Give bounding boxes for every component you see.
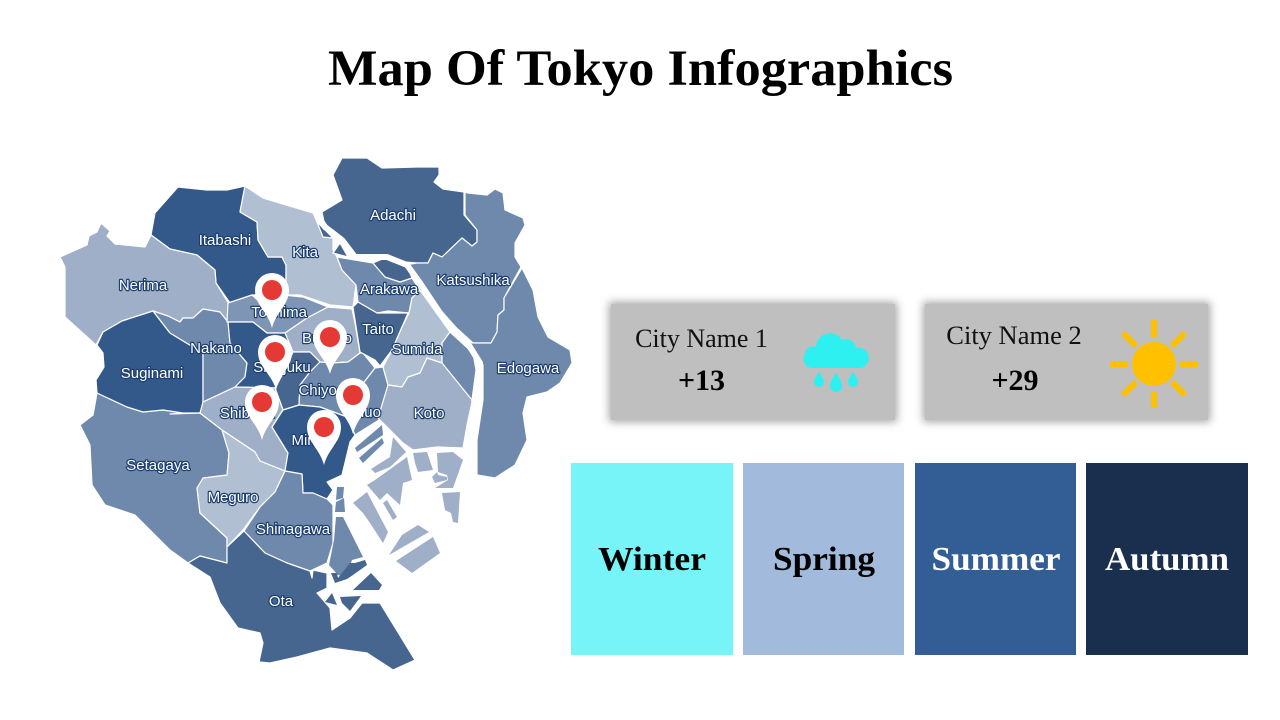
district labels: Toshima (251, 304, 308, 321)
location pin: Shinjuku (258, 335, 292, 390)
district labels: Suginami (121, 365, 183, 382)
district labels: Shibuya (220, 405, 275, 422)
city 2 name: City Name 2 (946, 320, 1082, 350)
map of Tokyo (60, 158, 572, 670)
city 1 temperature: +13 (678, 364, 725, 397)
panel: city 1 weather card (611, 304, 895, 420)
season block: Summer (915, 463, 1076, 655)
season block: Spring: Spring (773, 541, 875, 578)
district labels: Nerima (119, 277, 168, 294)
district labels: Arakawa (360, 281, 419, 298)
title: Map Of Tokyo Infographics (328, 41, 953, 97)
season block: Winter: Winter (598, 541, 706, 578)
bay islands (325, 425, 463, 611)
district labels: Nakano (190, 340, 242, 357)
panel: city 2 weather card (925, 304, 1208, 420)
river (317, 215, 480, 470)
district labels: Itabashi (199, 232, 251, 249)
city 1 name: City Name 1 (635, 324, 768, 353)
district labels: Minato (291, 432, 337, 449)
icon: sun (1110, 320, 1198, 408)
district labels (119, 207, 560, 610)
location pin: Shibuya (245, 385, 279, 440)
district labels: Edogawa (497, 360, 560, 377)
district labels: Taito (362, 321, 394, 338)
season block: Autumn: Autumn (1105, 541, 1229, 578)
district labels: Chuo (345, 404, 381, 421)
city 2 temperature: +29 (991, 364, 1039, 397)
district labels: Sumida (392, 341, 443, 358)
icon: rain cloud (803, 333, 869, 392)
district labels: Bunkyo (302, 330, 352, 347)
district labels: Shinagawa (256, 521, 331, 538)
district labels: Ota (269, 593, 294, 610)
district labels: Chiyoda (298, 382, 354, 399)
season block: Winter (571, 463, 733, 655)
district labels: Adachi (370, 207, 416, 224)
district labels: Katsushika (436, 272, 510, 289)
location pin: Minato (307, 410, 341, 465)
district labels: Koto (414, 405, 444, 422)
location pin: Bunkyo (313, 320, 347, 374)
district labels: Kita (292, 244, 319, 261)
district labels: Setagaya (126, 457, 190, 474)
district labels: Shinjuku (253, 359, 311, 376)
location pin: Toshima (255, 273, 289, 328)
season block: Autumn (1086, 463, 1248, 655)
location pin: Chuo (336, 378, 370, 434)
wards (60, 158, 572, 670)
season block: Summer: Summer (932, 541, 1060, 578)
season block: Spring (743, 463, 904, 655)
district labels: Meguro (208, 489, 258, 506)
